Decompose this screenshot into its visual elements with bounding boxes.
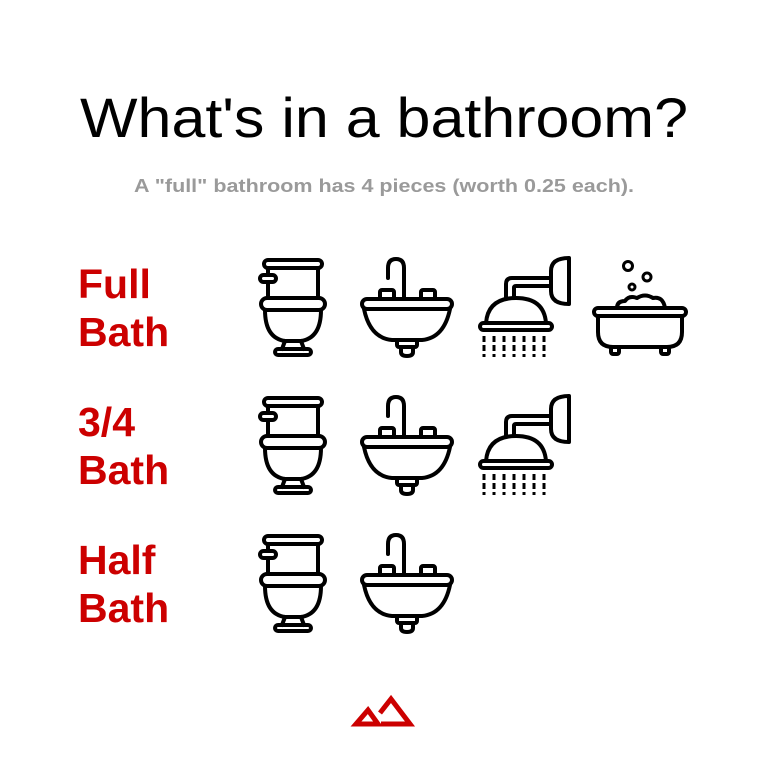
label: Full Bath: Full [78, 261, 151, 307]
row: full bath [78, 258, 686, 357]
label: Full Bath: Bath [78, 309, 169, 355]
icon: toilet [260, 260, 325, 355]
label: 3/4 Bath: 3/4 [78, 399, 135, 445]
icon: shower [480, 396, 569, 495]
title: What's in a bathroom? [80, 86, 688, 149]
row: 3/4 bath [78, 396, 569, 495]
icon: sink [362, 259, 452, 356]
label: Half Bath: Bath [78, 585, 169, 631]
icon: toilet [260, 536, 325, 631]
logo [356, 699, 410, 724]
icon: sink [362, 535, 452, 632]
icon: shower [480, 258, 569, 357]
label: Half Bath: Half [78, 537, 156, 583]
icon: bathtub [594, 262, 686, 354]
label: 3/4 Bath: Bath [78, 447, 169, 493]
row: half bath [78, 535, 452, 632]
icon: toilet [260, 398, 325, 493]
icon: sink [362, 397, 452, 494]
subtitle: A "full" bathroom has 4 pieces (worth 0.25 each). [134, 176, 634, 196]
